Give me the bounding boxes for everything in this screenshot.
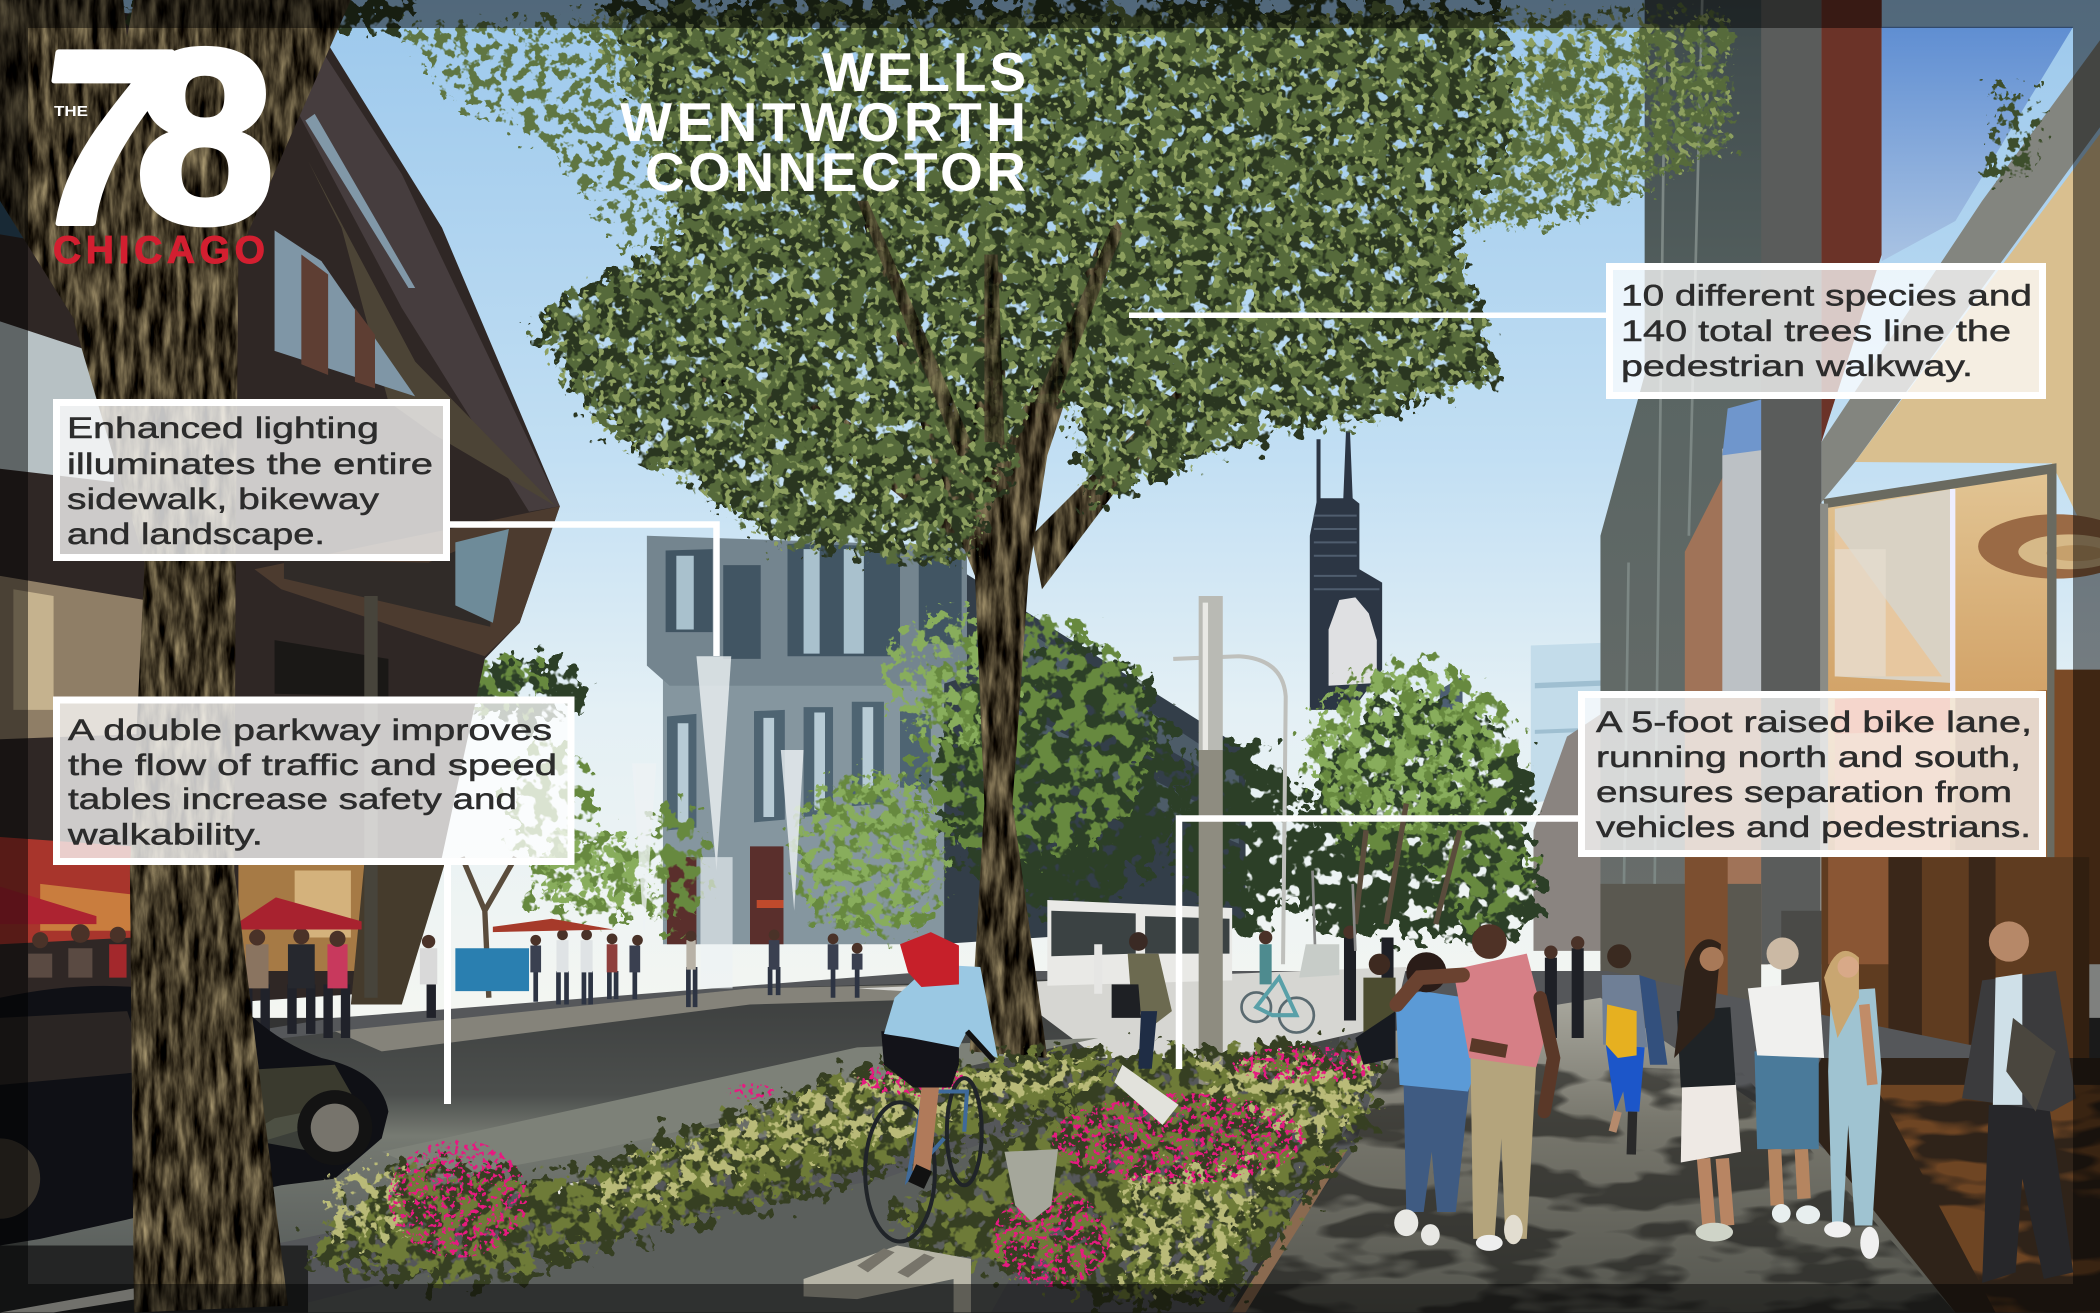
callout: lighting: sidewalk, bikeway (67, 483, 379, 516)
callout: lighting: illuminates the entire (67, 448, 433, 481)
sky (0, 0, 2100, 1018)
title: WELLS (822, 41, 1026, 103)
logo: The 78 Chicago (17, 0, 275, 276)
callout: parkway: A double parkway improves (68, 714, 552, 747)
callout: bike lane: ensures separation from (1596, 776, 2012, 809)
right building (1600, 0, 2100, 1152)
logo numerals (17, 0, 275, 276)
centre building (647, 536, 1246, 944)
callout: lighting: Enhanced lighting (67, 412, 379, 445)
distant skyscraper (1310, 431, 1463, 710)
left tree trunk (0, 0, 351, 1313)
title: WENTWORTH (620, 91, 1026, 153)
parked black car (0, 986, 388, 1246)
callout: trees: 10 different species and (1621, 280, 2032, 312)
woman with yellow backpack (1602, 944, 1667, 1154)
callout: bike lane: A 5-foot raised bike lane, (1596, 706, 2032, 739)
person on phone (1112, 932, 1172, 1069)
leader line: trees (1129, 312, 1607, 318)
left building (0, 0, 560, 1018)
leader line: bike lane (1179, 818, 1578, 1069)
cafe umbrellas (0, 887, 783, 932)
far bikes and seated man (1242, 944, 1396, 1065)
centre tree upper branches (857, 201, 1122, 455)
logo numerals: 8 (135, 0, 275, 275)
cafe water glimpse (455, 948, 529, 991)
title: CONNECTOR (645, 141, 1026, 203)
callout: parkway: the flow of traffic and speed (68, 749, 557, 782)
logo word the: THE (54, 103, 88, 120)
callout: parkway: tables increase safety and (68, 783, 517, 816)
callout: lighting (56, 402, 446, 558)
bollard light and bike stand (804, 1065, 1179, 1313)
leader line: parkway (444, 865, 451, 1104)
logo word chicago: CHICAGO (53, 229, 265, 272)
callout: bike lane: running north and south, (1596, 741, 2021, 774)
cyclist with red backpack (865, 932, 998, 1242)
three women talking (1674, 938, 1882, 1259)
man in dark suit (1962, 921, 2076, 1283)
street lamp pole (1199, 596, 1223, 1098)
street light (1173, 656, 1355, 964)
planter beds (308, 1046, 1382, 1310)
centre tree (696, 201, 1187, 1058)
callout: trees: pedestrian walkway. (1621, 350, 1973, 383)
crowd across the street (40, 938, 1578, 1038)
callout: bike lane: vehicles and pedestrians. (1596, 811, 2031, 844)
logo numerals: 7 (17, 0, 190, 276)
crowd heads (32, 924, 1584, 959)
street ground (0, 967, 2100, 1313)
couple walking (1394, 924, 1554, 1251)
tree canopy (0, 0, 2042, 563)
glass light pendants (632, 656, 804, 988)
callout: parkway: walkability. (67, 818, 263, 852)
bus (1047, 900, 1232, 986)
distant glass building (1531, 643, 1607, 951)
callout: trees (1610, 266, 2042, 396)
mid-ground trees (442, 609, 1540, 998)
callout: lighting: and landscape. (67, 518, 325, 551)
title (620, 41, 1026, 203)
callout: bike lane (1582, 694, 2042, 854)
leader line: lighting (450, 524, 716, 656)
callout: parkway (56, 700, 571, 862)
callout: trees: 140 total trees line the (1621, 315, 2011, 348)
